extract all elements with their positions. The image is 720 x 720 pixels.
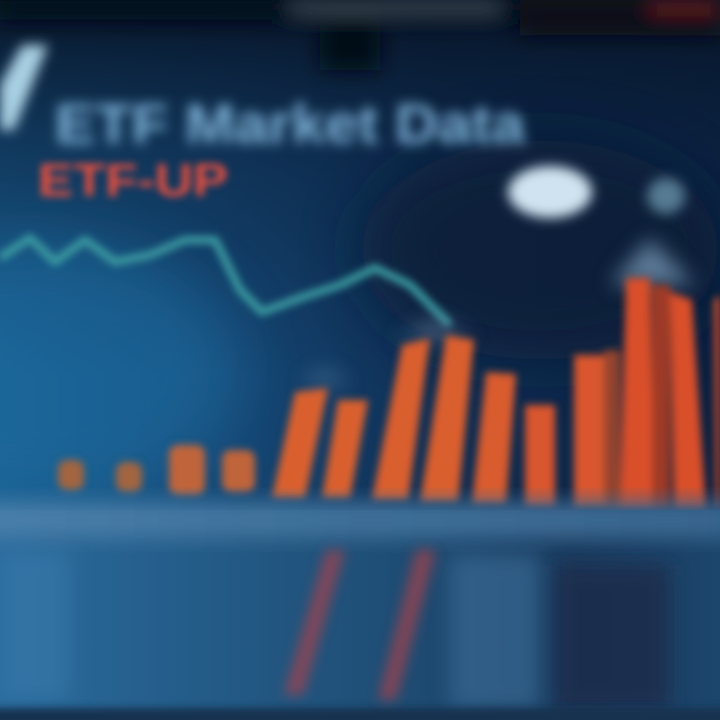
bar chart [58, 278, 720, 510]
floor panel [0, 502, 720, 720]
logo slash [0, 45, 48, 130]
callout: small dot [647, 178, 685, 214]
top dark header shapes [0, 0, 720, 70]
callout: white oval [508, 166, 592, 218]
line chart [0, 238, 450, 325]
peak glow [300, 238, 695, 385]
red subtitle: ETF-UP [38, 154, 228, 206]
title: ETF Market Data [55, 92, 526, 155]
reflected red bars [284, 550, 436, 700]
